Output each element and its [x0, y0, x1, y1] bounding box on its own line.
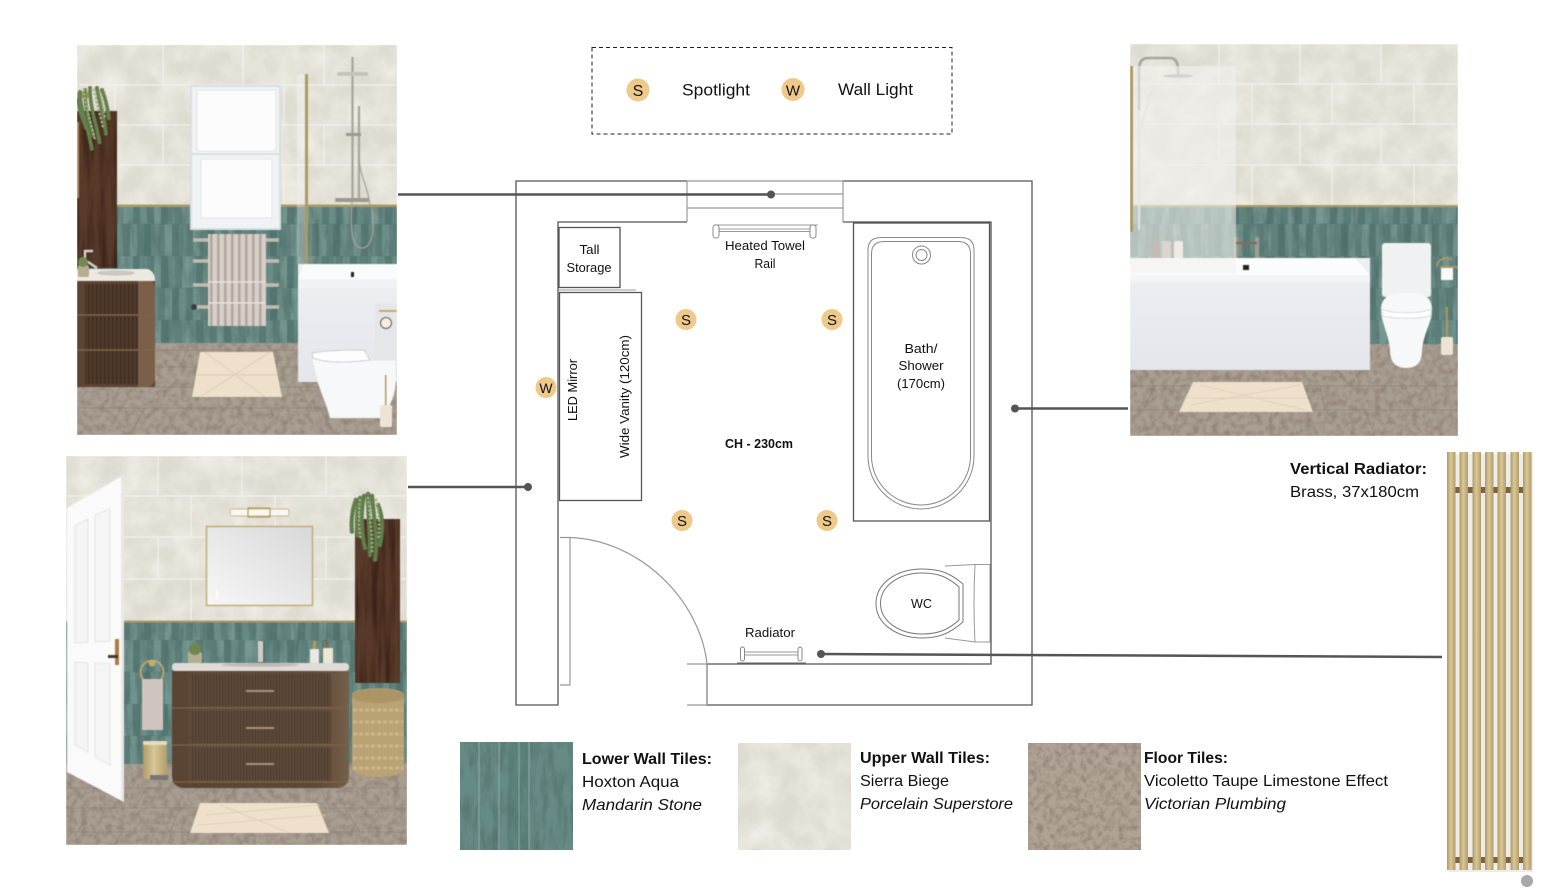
text: upper wall tiles: [860, 750, 1013, 813]
heated towel rail symbol: Heated Towel: [725, 238, 805, 253]
heated towel rail with towel: [191, 234, 279, 326]
lower wall green tiles: [66, 620, 407, 764]
tall storage unit: [559, 228, 636, 290]
heated towel rail symbol: [713, 225, 818, 271]
towel ring with towel: [140, 660, 164, 730]
wall light: [230, 508, 289, 517]
shower riser and head: [335, 57, 373, 248]
spotlight top right: S: [827, 312, 837, 329]
plan window: [687, 181, 843, 222]
spotlight bottom right: S: [822, 513, 832, 530]
tap and counter items: [188, 638, 333, 663]
spotlight marker: S: [633, 83, 643, 100]
spotlight top left: S: [681, 312, 691, 329]
bath mat: [190, 803, 329, 833]
plan walls: [516, 181, 1032, 705]
pedal bin: [143, 741, 168, 780]
wall light marker: [782, 78, 804, 101]
radiator specification text: Vertical Radiator:: [1290, 461, 1427, 478]
bath: [298, 264, 397, 382]
floor tiles: [1130, 344, 1458, 436]
tall wood cabinet: [355, 519, 400, 683]
wall light marker: W: [539, 380, 553, 396]
wide vanity unit: [172, 663, 349, 788]
bath and shower: (170cm): [897, 376, 945, 391]
tall storage unit: Tall: [580, 242, 600, 257]
WC: [876, 564, 990, 642]
text: upper wall tiles: Upper Wall Tiles:: [860, 750, 990, 767]
spotlight bottom right: [816, 510, 838, 531]
door swing: [560, 538, 707, 705]
text: floor tiles: Victorian Plumbing: [1144, 796, 1286, 813]
bath and shower: Bath/: [904, 341, 938, 356]
tall wood cabinet with plant: [77, 88, 117, 268]
text: floor tiles: [1144, 750, 1389, 813]
legend box: [592, 48, 952, 134]
text: lower wall tiles: Hoxton Aqua: [582, 774, 679, 791]
text: floor tiles: Vicoletto Taupe Limestone Effect: [1144, 773, 1389, 790]
bottles: [1151, 235, 1183, 259]
swatch: floor tiles: [1028, 743, 1141, 850]
bath mat: [1179, 382, 1313, 412]
lower wall green tiles: [77, 204, 397, 344]
leader line: vanity elevation: [408, 483, 532, 491]
door: [67, 475, 124, 802]
laundry basket: [352, 688, 404, 777]
text: floor tiles: Floor Tiles:: [1144, 750, 1228, 767]
window: [190, 85, 281, 230]
upper wall tiles: [66, 456, 407, 621]
wall light marker: W: [786, 82, 801, 100]
text: upper wall tiles: Porcelain Superstore: [860, 796, 1013, 813]
bath and shower: [854, 223, 990, 521]
LED mirror: [206, 526, 312, 606]
toilet: [1381, 243, 1432, 368]
swatch: upper wall tiles: [738, 743, 851, 850]
lower wall green tiles: [1130, 205, 1458, 344]
text: lower wall tiles: [582, 751, 712, 814]
vanity side view with basin: [77, 251, 155, 387]
bath and shower: Shower: [898, 358, 944, 373]
text: lower wall tiles: Lower Wall Tiles:: [582, 751, 712, 768]
radiator specification text: Brass, 37x180cm: [1290, 484, 1419, 501]
wall light label: Wall Light: [838, 80, 913, 99]
vanity unit: Wide Vanity (120cm): [617, 335, 632, 458]
toilet brush: [1441, 307, 1453, 355]
spotlight top right: [822, 309, 842, 330]
vanity unit: LED Mirror: [565, 358, 580, 421]
spotlight label: Spotlight: [682, 80, 750, 100]
spotlight bottom left: [672, 510, 692, 531]
door handle: [108, 639, 119, 665]
heated towel rail symbol: Rail: [754, 256, 776, 271]
text: upper wall tiles: Sierra Biege: [860, 773, 949, 790]
spotlight bottom left: S: [677, 513, 687, 530]
vanity unit: [560, 292, 642, 500]
shower screen: [297, 74, 308, 264]
spotlight top left: [676, 309, 696, 330]
leader line: bath elevation: [1011, 404, 1128, 412]
text: lower wall tiles: Mandarin Stone: [582, 797, 702, 814]
bath mat: [192, 352, 282, 397]
leader line: window elevation: [398, 190, 775, 198]
floor tiles: [66, 764, 407, 845]
toilet roll holder: [1437, 258, 1458, 280]
bath taps: [1234, 237, 1259, 258]
floor plan: [516, 181, 1032, 705]
swatch: lower wall tiles: [460, 742, 573, 850]
upper wall tiles: [1130, 44, 1458, 205]
toilet: [312, 304, 397, 427]
ceiling height label: CH - 230cm: [725, 436, 793, 451]
shower screen with shower: [1130, 58, 1236, 273]
spotlight marker: [626, 78, 650, 102]
radiator symbol: Radiator: [745, 625, 796, 640]
leader line: radiator: [817, 650, 1442, 658]
radiator specification text: [1290, 461, 1427, 501]
vertical brass radiator: [1447, 452, 1533, 887]
panel: vanity wall elevation: [66, 456, 407, 845]
bath: [1130, 258, 1370, 370]
panel: window wall elevation: [77, 45, 397, 435]
radiator symbol: [737, 625, 806, 663]
floor tiles: [77, 343, 397, 435]
WC: WC: [911, 596, 932, 611]
trailing plant: [352, 494, 382, 560]
wall light marker: [536, 377, 556, 398]
upper wall tiles: [77, 45, 397, 206]
tall storage unit: Storage: [566, 260, 612, 275]
panel: bath wall elevation: [1130, 44, 1458, 436]
